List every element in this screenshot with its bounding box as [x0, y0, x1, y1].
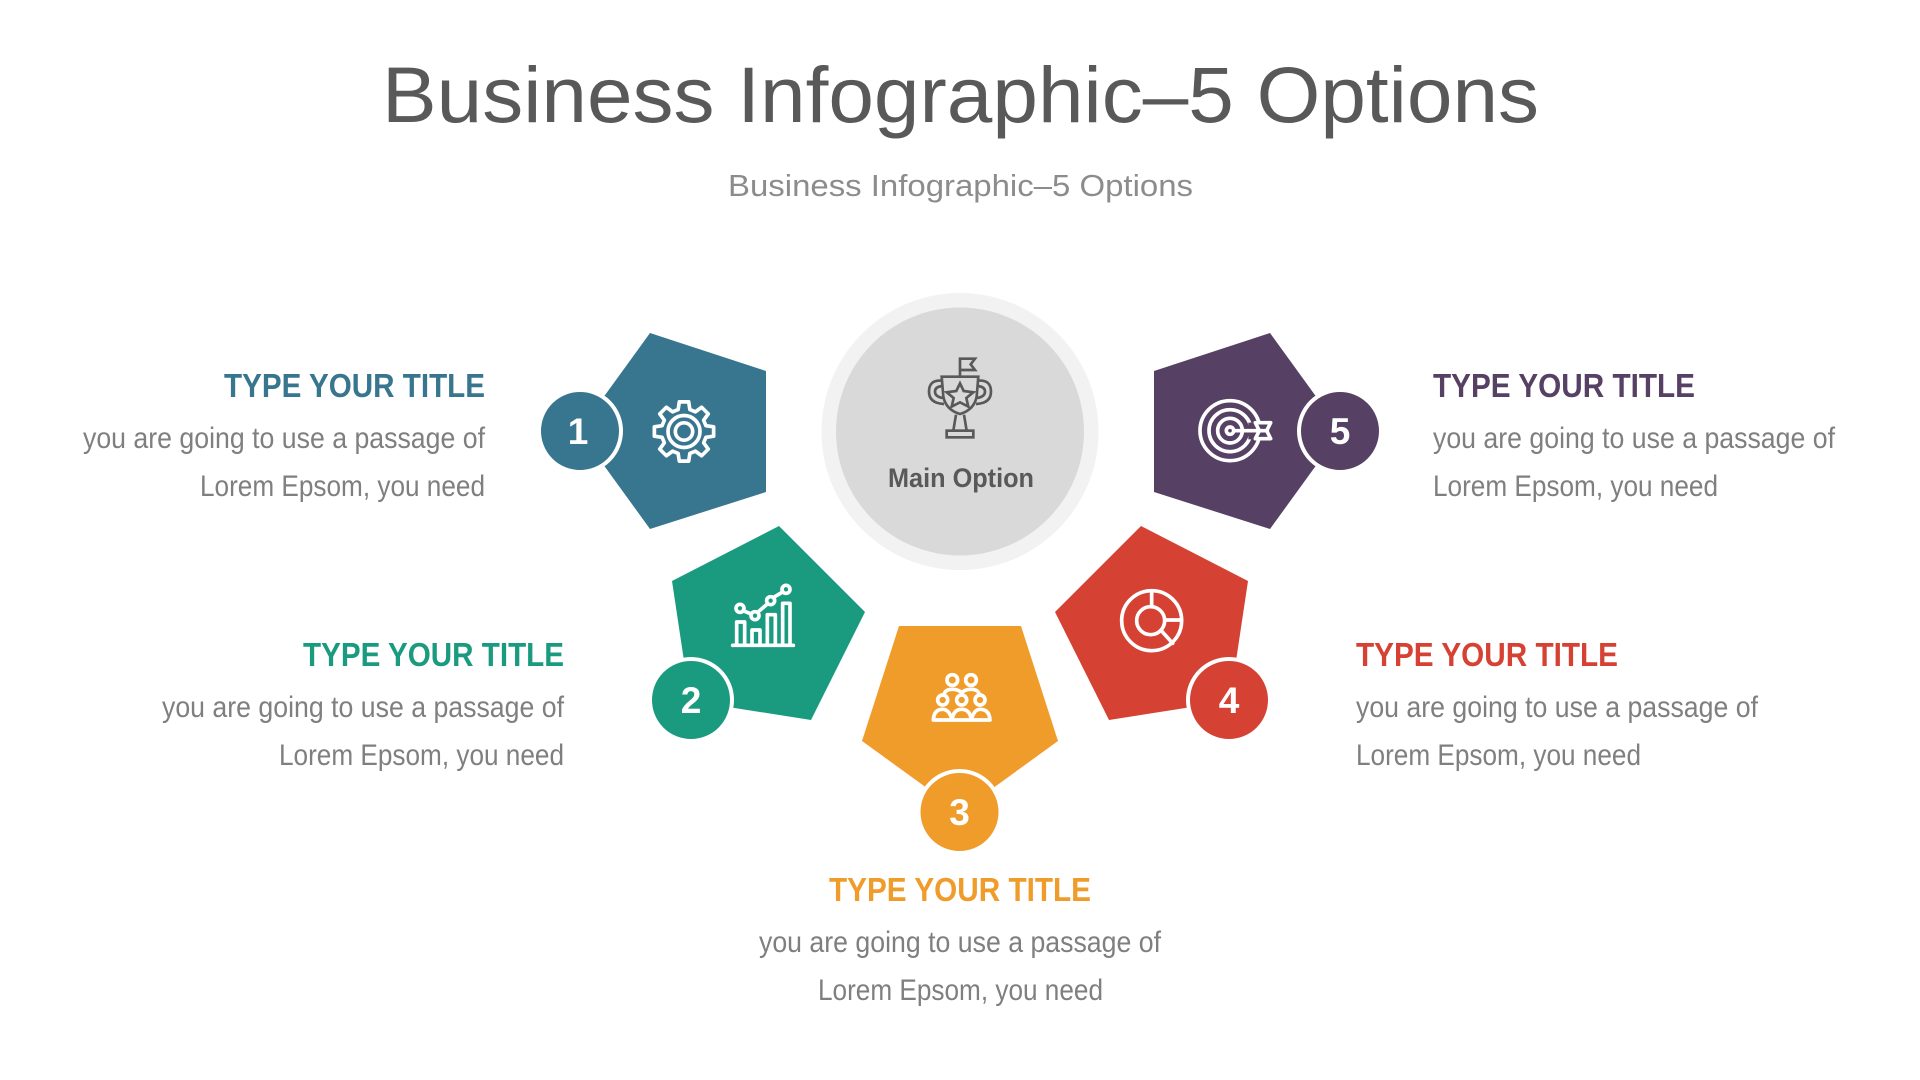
icon: target	[1200, 401, 1273, 461]
text: option 5: Lorem Epsom, you need	[1433, 470, 1718, 503]
badge: number 3	[918, 771, 1000, 853]
label: main option: Main Option	[888, 463, 1034, 493]
panel: option 4 shape	[1055, 526, 1270, 741]
badge: number 1	[539, 390, 621, 472]
text: option 3: you are going to use a passage of	[759, 926, 1162, 959]
title: Business Infographic–5 Options	[382, 50, 1539, 139]
icon: donut chart	[1122, 591, 1182, 651]
text: option 3: Lorem Epsom, you need	[818, 974, 1103, 1007]
panel: option 1 shape	[539, 333, 766, 529]
panel: option 3 shape	[862, 626, 1058, 853]
panel: option 5 shape	[1154, 333, 1381, 529]
text: option 1: TYPE YOUR TITLE	[224, 367, 485, 404]
badge: number 5: 5	[1330, 411, 1350, 452]
text: option 5	[1433, 367, 1836, 503]
text: option 5: TYPE YOUR TITLE	[1433, 367, 1695, 404]
badge: number 5	[1299, 390, 1381, 472]
text: option 4: TYPE YOUR TITLE	[1356, 636, 1618, 673]
text: option 1: Lorem Epsom, you need	[200, 470, 485, 503]
subtitle: Business Infographic–5 Options	[728, 168, 1193, 203]
badge: number 2: 2	[681, 680, 701, 721]
icon: group of people	[933, 675, 990, 720]
panel: option 2 shape	[650, 526, 865, 741]
text: option 4: Lorem Epsom, you need	[1356, 739, 1641, 772]
text: option 4	[1356, 636, 1759, 772]
text: option 1	[83, 367, 486, 503]
text: option 2: TYPE YOUR TITLE	[303, 636, 564, 673]
text: option 5: you are going to use a passage of	[1433, 422, 1836, 455]
icon: growth chart	[733, 585, 793, 645]
text: option 2: Lorem Epsom, you need	[279, 739, 564, 772]
icon: trophy	[929, 359, 991, 437]
badge: number 4: 4	[1219, 680, 1240, 721]
badge: number 2	[650, 659, 732, 741]
text: option 2: you are going to use a passage of	[162, 691, 565, 724]
text: option 3: TYPE YOUR TITLE	[829, 871, 1091, 908]
badge: number 4	[1188, 659, 1270, 741]
text: option 4: you are going to use a passage of	[1356, 691, 1759, 724]
text: option 1: you are going to use a passage of	[83, 422, 486, 455]
panel: main option	[822, 293, 1098, 570]
badge: number 3: 3	[949, 792, 970, 833]
icon: gear	[654, 402, 714, 461]
text: option 2	[162, 636, 565, 772]
badge: number 1: 1	[568, 411, 588, 452]
text: option 3	[759, 871, 1162, 1007]
